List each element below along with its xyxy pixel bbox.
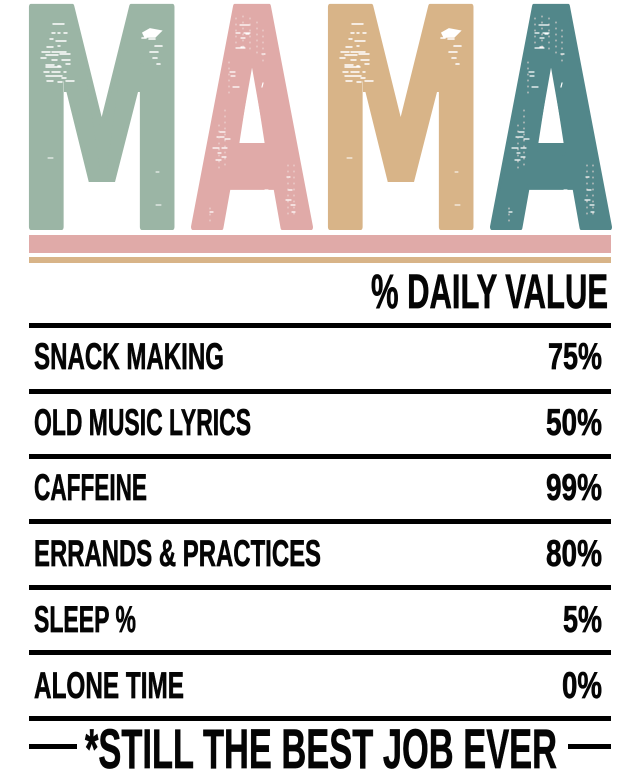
row: sleep: SLEEP % [34,599,136,640]
row: old music lyrics: OLD MUSIC LYRICS [34,402,251,443]
row: sleep: 5% [563,599,602,640]
row: sleep [34,599,602,640]
row: alone time: ALONE TIME [34,665,184,706]
title: MAMA [15,0,611,299]
row: caffeine: CAFFEINE [34,467,147,508]
row: old music lyrics [34,402,602,443]
pink banner bar [29,235,611,253]
row: alone time: 0% [562,665,602,706]
row: old music lyrics: 50% [546,402,602,443]
tan banner bar [29,257,611,263]
row: snack making: SNACK MAKING [34,336,224,377]
row: caffeine [34,467,602,508]
row: caffeine: 99% [546,467,602,508]
row: snack making: 75% [548,336,602,377]
row: alone time [34,665,602,706]
row: errands and practices: 80% [546,533,602,574]
row: snack making [34,336,602,377]
row: errands and practices: ERRANDS & PRACTICES [34,533,321,574]
